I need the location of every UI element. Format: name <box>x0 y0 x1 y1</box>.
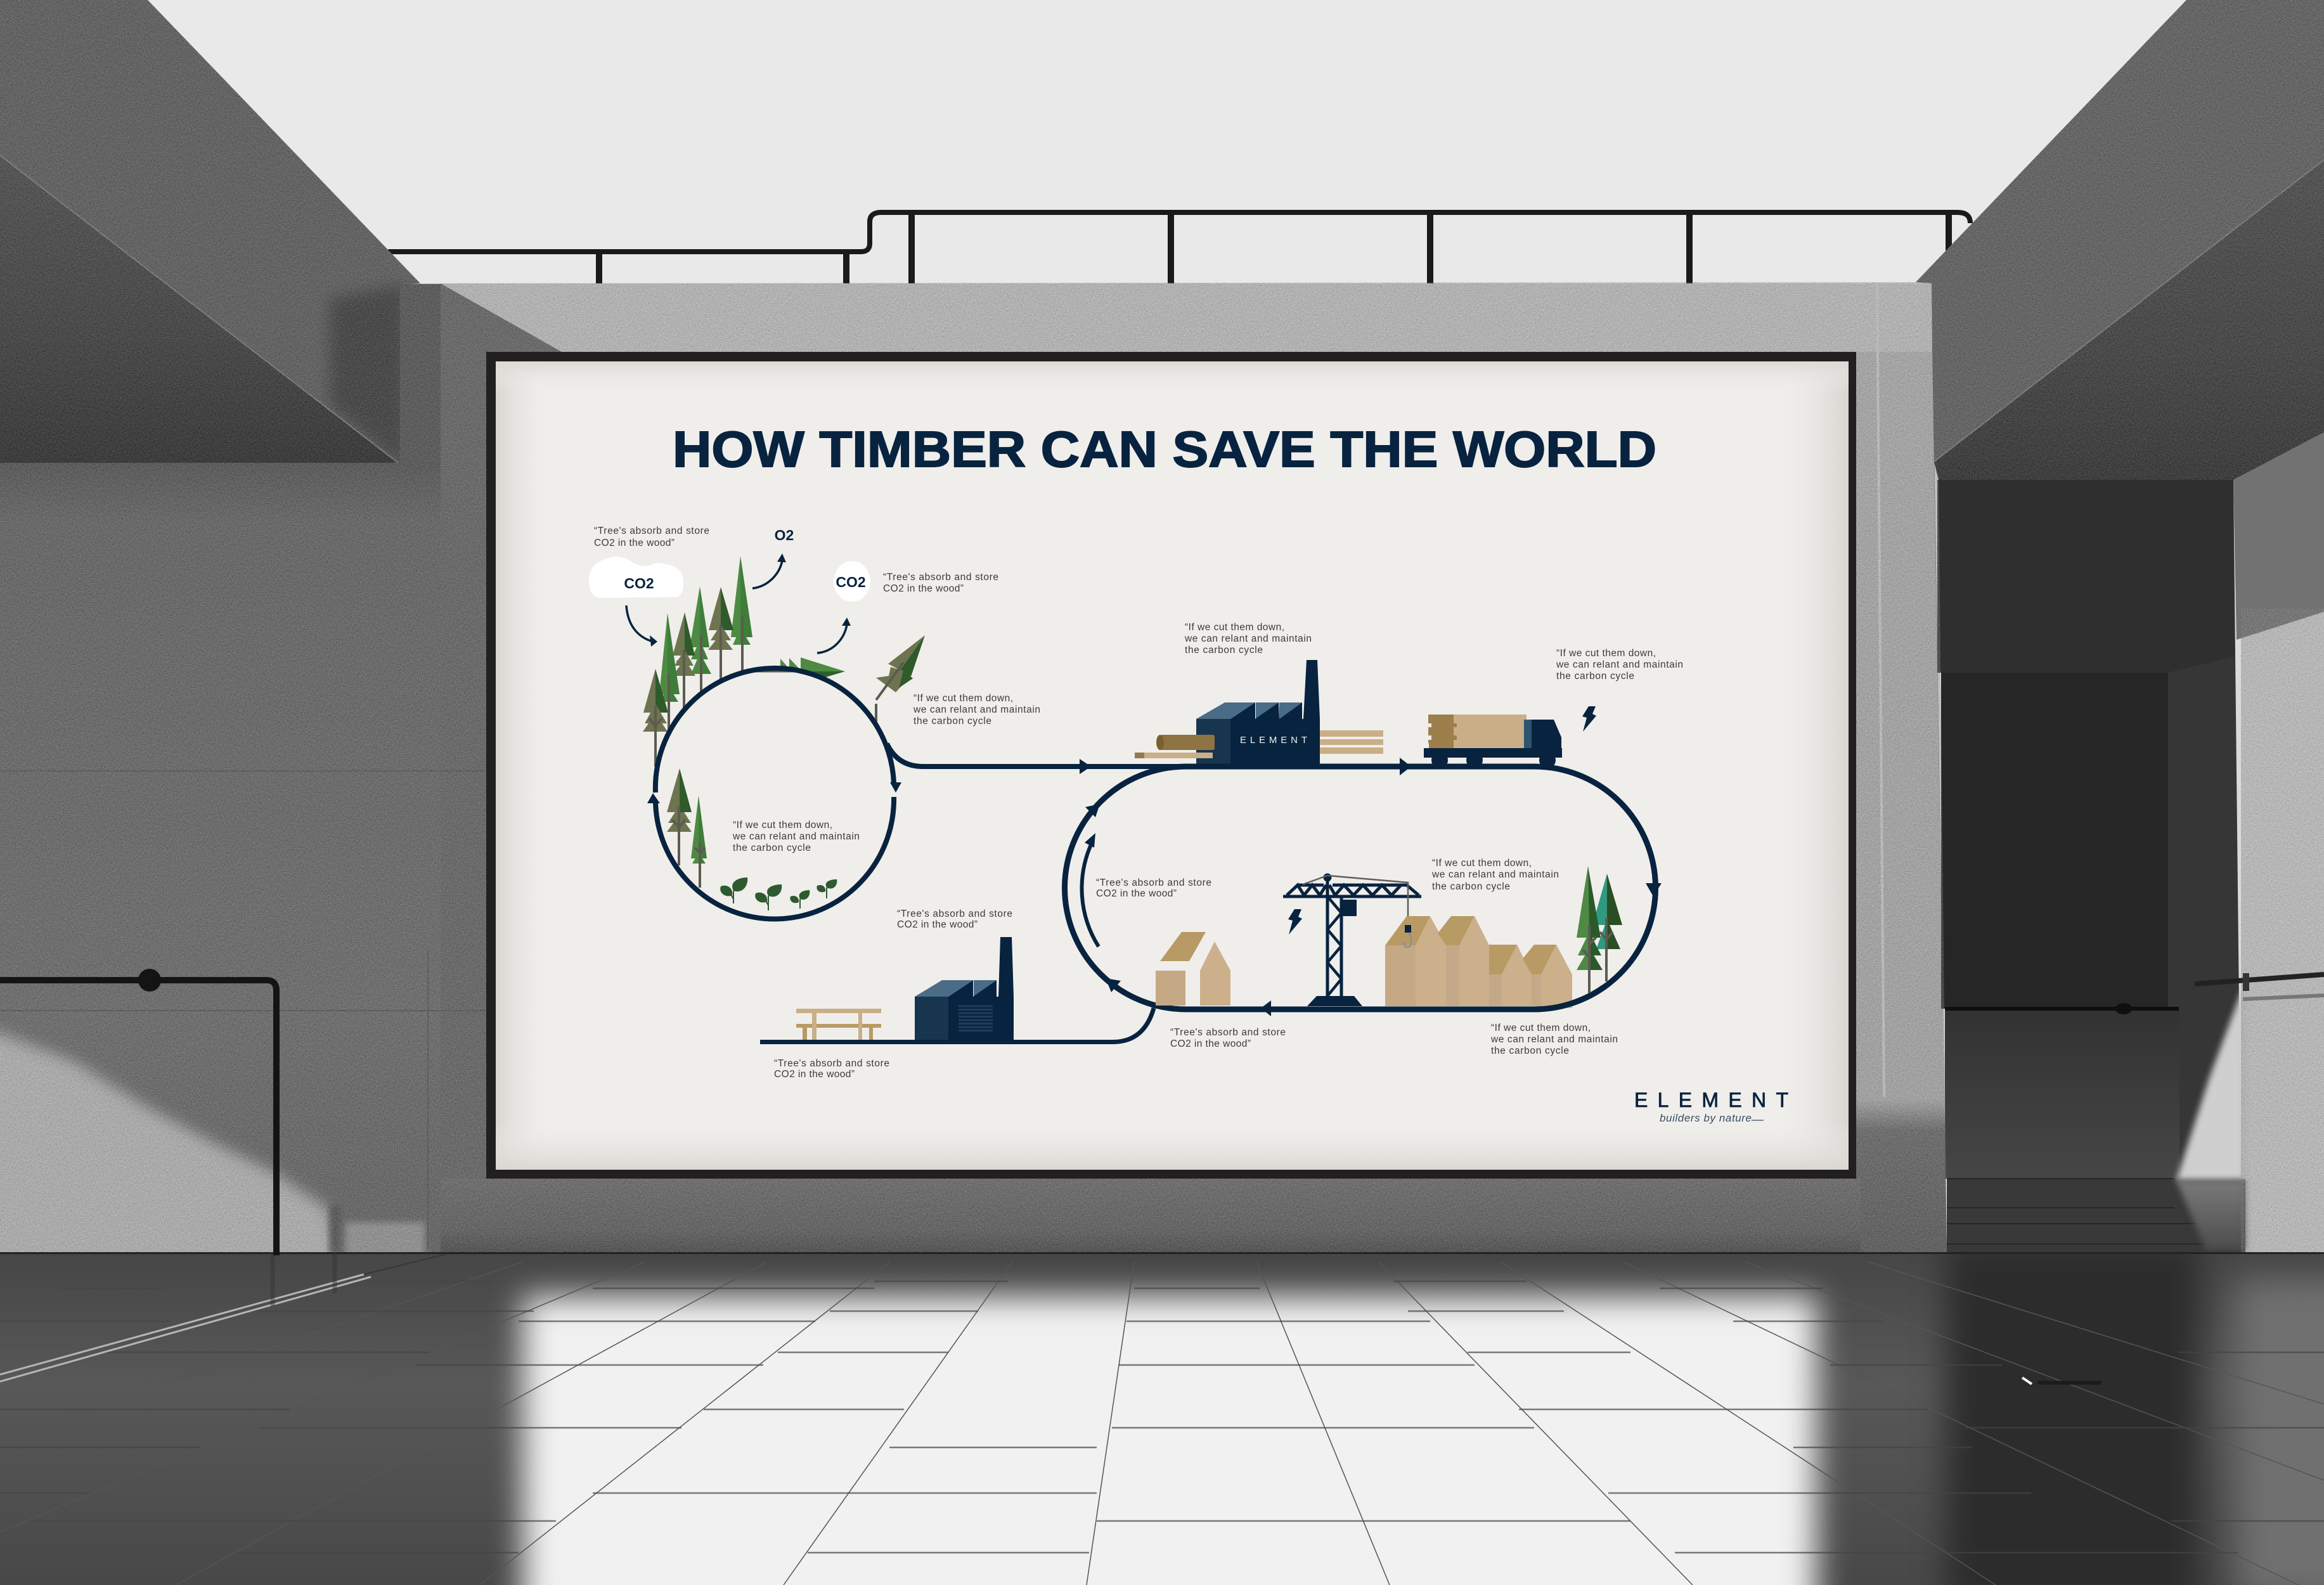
text: cut them down 6 <box>1490 1023 1618 1056</box>
connector: circle to loop <box>887 744 1192 774</box>
left slab <box>0 0 441 469</box>
left handrail <box>0 969 276 1255</box>
factory: furniture <box>915 937 1014 1044</box>
arrow: circle left <box>647 793 660 803</box>
logo: ELEMENT <box>1634 1089 1788 1124</box>
cloud: CO2 <box>589 557 683 598</box>
arrow: circle right <box>890 782 901 792</box>
text: cut them down 4: we can relant and maintain <box>1556 659 1683 670</box>
felled tree <box>749 657 845 678</box>
cloud: CO2: CO2 <box>624 575 654 592</box>
curved arrow: CO2 into trees <box>626 605 657 647</box>
tree inside circle: olive <box>667 768 692 865</box>
crane <box>1283 874 1421 1006</box>
text: trees absorb 4: CO2 in the wood” <box>774 1069 855 1080</box>
sunlit patch on left wall <box>0 1024 425 1268</box>
poster vignette <box>496 361 1849 1170</box>
text: trees absorb 5: “Tree's absorb and store <box>1096 877 1211 888</box>
falling tree and stump <box>876 635 925 724</box>
icon: lightning near truck <box>1582 706 1596 732</box>
arrow: top <box>1400 758 1411 775</box>
text: cut them down 1: we can relant and maintain <box>913 704 1040 715</box>
houses row <box>1385 916 1572 1008</box>
corridor handrail <box>1945 1003 2179 1014</box>
title: HOW TIMBER CAN SAVE THE WORLD <box>673 421 1656 477</box>
arrow: upper left <box>1085 804 1100 817</box>
text: cut them down 5: “If we cut them down, <box>1432 858 1532 869</box>
text: cut them down 3: “If we cut them down, <box>1185 622 1284 633</box>
text: trees absorb 4: “Tree's absorb and store <box>774 1058 889 1069</box>
connector: loop to bench <box>760 1008 1154 1042</box>
icon: lightning near crane <box>1288 909 1302 935</box>
poster background <box>496 361 1849 1170</box>
inner recycling arc <box>1082 833 1099 947</box>
text: trees absorb 5 <box>1096 877 1211 899</box>
text: cut them down 1: “If we cut them down, <box>913 693 1013 704</box>
text: trees absorb 2: CO2 in the wood” <box>883 583 964 594</box>
text: cut them down 6: we can relant and maintain <box>1490 1034 1618 1045</box>
right slab <box>1916 0 2324 480</box>
forest on the circle <box>643 556 752 767</box>
text: cut them down 6: the carbon cycle <box>1491 1045 1569 1056</box>
sawn planks <box>1320 730 1383 754</box>
factory: sawmill <box>1196 660 1320 765</box>
text: trees absorb 6 <box>1170 1027 1286 1049</box>
text: cut them down 2: we can relant and maintain <box>732 831 860 842</box>
cycle: forest circle <box>647 668 901 919</box>
text: trees absorb 3 <box>897 909 1012 930</box>
concrete grain <box>0 0 2324 1262</box>
text: cut them down 5 <box>1431 858 1559 892</box>
bench <box>796 1009 881 1040</box>
text: trees absorb 3: “Tree's absorb and store <box>897 909 1012 919</box>
rooftop railing <box>388 212 1970 284</box>
text: cut them down 2: “If we cut them down, <box>733 820 832 831</box>
text: cut them down 1: the carbon cycle <box>913 716 991 727</box>
logo: ELEMENT: builders by nature <box>1660 1112 1752 1124</box>
loop: main cycle <box>1065 758 1662 1016</box>
text: trees absorb 2: “Tree's absorb and store <box>883 572 998 583</box>
text: trees absorb 1 <box>594 526 709 548</box>
label: O2: O2 <box>775 527 794 543</box>
house: under construction <box>1156 932 1230 1006</box>
bubble: CO2 <box>834 561 870 602</box>
corridor on the right <box>1937 480 2251 1258</box>
text: cut them down 3 <box>1184 622 1312 656</box>
trees on right of loop <box>1577 866 1622 993</box>
text: trees absorb 1: “Tree's absorb and store <box>594 526 709 536</box>
tree inside circle: green <box>691 796 707 888</box>
factory: sawmill: ELEMENT <box>1240 735 1307 746</box>
text: trees absorb 4 <box>774 1058 889 1080</box>
text: trees absorb 6: “Tree's absorb and store <box>1170 1027 1286 1038</box>
text: cut them down 4: the carbon cycle <box>1556 671 1634 682</box>
text: cut them down 6: “If we cut them down, <box>1491 1023 1591 1033</box>
logo: ELEMENT: ELEMENT <box>1634 1089 1788 1111</box>
truck <box>1424 715 1562 768</box>
curved arrow: trees to O2 <box>752 553 786 588</box>
text: trees absorb 3: CO2 in the wood” <box>897 919 978 930</box>
arrow: lower left <box>1106 978 1121 992</box>
repaint bottom line over houses <box>1331 987 1604 1009</box>
floor <box>0 1243 2324 1585</box>
floor tile lines <box>0 1252 2324 1585</box>
text: cut them down 5: the carbon cycle <box>1432 881 1510 892</box>
text: cut them down 4: “If we cut them down, <box>1556 648 1656 659</box>
text: cut them down 5: we can relant and maintain <box>1431 869 1559 880</box>
bubble: CO2: CO2 <box>836 574 866 590</box>
seedlings <box>720 877 837 910</box>
arrow: right <box>1646 883 1662 896</box>
text: cut them down 4 <box>1556 648 1683 682</box>
text: cut them down 2 <box>732 820 860 853</box>
poster <box>496 361 1849 1170</box>
crane hook <box>1404 925 1411 947</box>
small object on floor <box>2022 1378 2101 1385</box>
curved arrow: felled tree to CO2 <box>817 618 851 653</box>
text: trees absorb 1: CO2 in the wood” <box>594 538 675 548</box>
right lit wall <box>2176 432 2324 1265</box>
text: trees absorb 2 <box>883 572 998 594</box>
arrow: bottom <box>1261 1000 1271 1016</box>
text: cut them down 3: the carbon cycle <box>1185 645 1263 656</box>
text: cut them down 1 <box>913 693 1040 727</box>
left concrete wall <box>0 456 444 1252</box>
text: cut them down 2: the carbon cycle <box>733 843 811 853</box>
log and plank entering factory <box>1135 735 1215 758</box>
poster frame <box>486 352 1856 1179</box>
text: cut them down 3: we can relant and maintain <box>1184 633 1312 644</box>
text: trees absorb 6: CO2 in the wood” <box>1170 1038 1251 1049</box>
main concrete wall behind poster <box>0 283 1947 1254</box>
right handrail <box>2195 973 2324 999</box>
text: trees absorb 5: CO2 in the wood” <box>1096 888 1177 899</box>
